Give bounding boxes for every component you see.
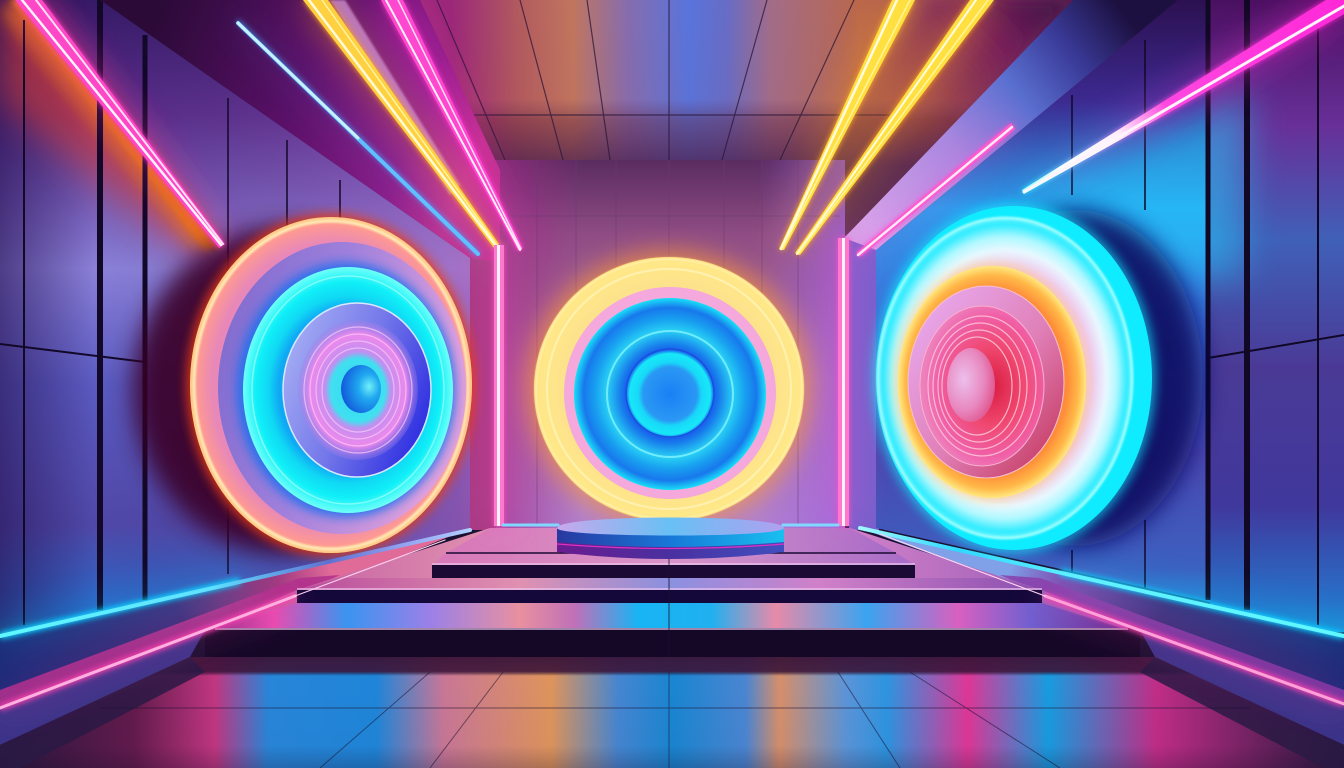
left ceiling beam — [100, 0, 500, 262]
stairs — [205, 528, 1140, 657]
floor side ledges — [0, 528, 1344, 745]
tube: orange-yellow left — [303, 0, 499, 248]
tube: pink floor right — [880, 534, 1344, 704]
back wall — [460, 160, 879, 530]
left wall — [0, 0, 470, 640]
tube: pink short right — [856, 123, 1015, 257]
tube: pink vertical right — [838, 238, 849, 526]
reflective floor — [0, 657, 1344, 768]
tube: top-left pink — [15, 0, 225, 248]
round podium — [557, 518, 784, 559]
tube: pink vertical left — [494, 245, 504, 526]
tube: magenta far right — [1022, 0, 1344, 194]
left ring — [133, 213, 476, 557]
centre ring — [527, 250, 811, 528]
tube: pink floor left — [0, 540, 445, 708]
tube: yellow right 1 — [779, 0, 915, 250]
right ring — [872, 202, 1203, 554]
right ceiling beam — [844, 0, 1178, 250]
right wall — [876, 0, 1344, 632]
tube: blue — [238, 23, 478, 254]
tube: blue base strip — [503, 524, 838, 526]
ceiling — [103, 0, 1178, 237]
tube: cyan lower right — [860, 528, 1344, 636]
tube: cyan lower left — [0, 530, 470, 636]
tube: yellow right 2 — [795, 0, 994, 255]
tube: pink left — [381, 0, 523, 251]
